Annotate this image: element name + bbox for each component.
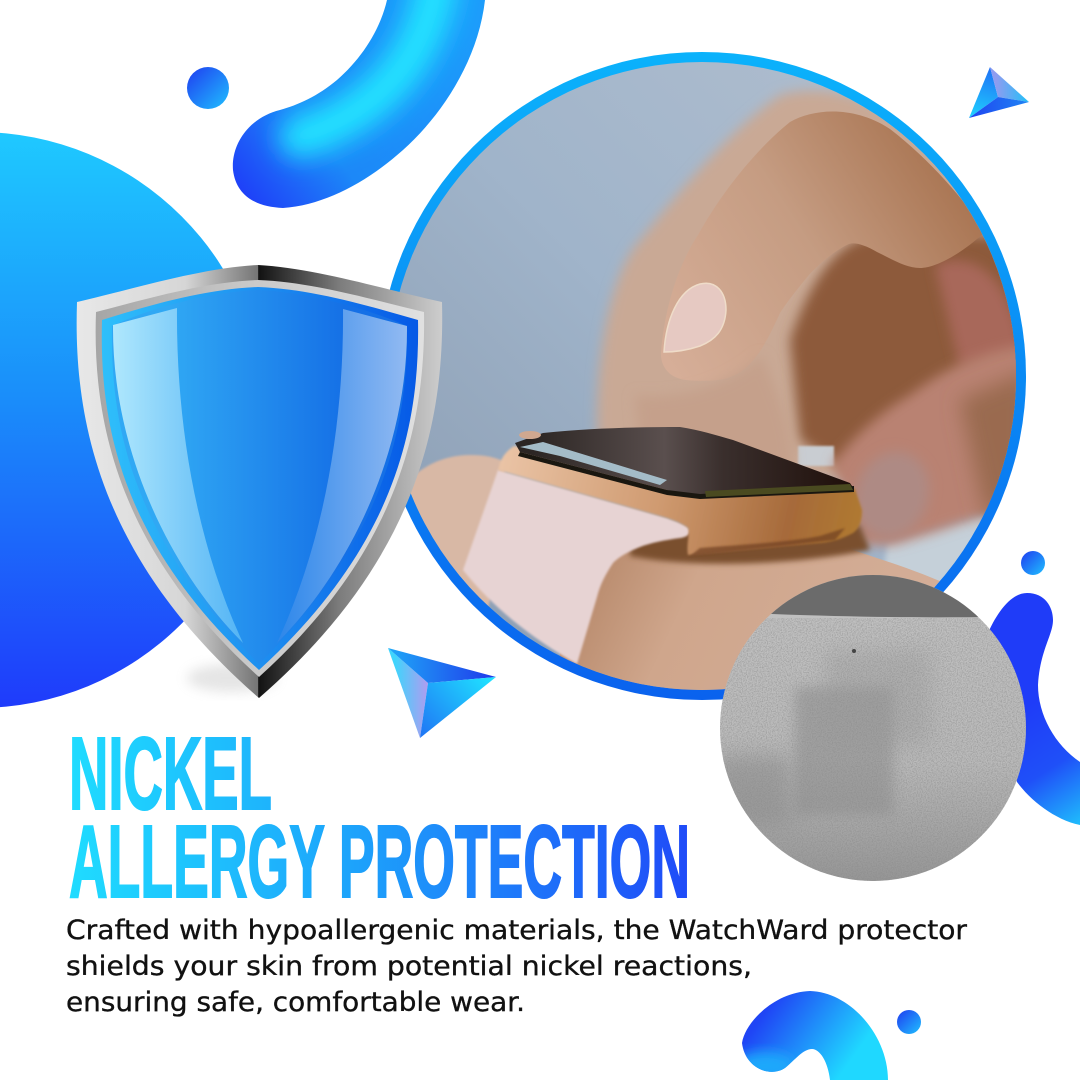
watch band — [463, 470, 690, 664]
body text: shields your skin from potential nickel reactions, — [66, 951, 752, 982]
small dot right — [1021, 551, 1045, 575]
dark top band — [771, 575, 978, 618]
light patch behind finger — [798, 446, 834, 466]
watch case — [498, 446, 862, 555]
photo background — [400, 62, 1016, 690]
forearm — [560, 550, 940, 690]
irritated skin patch — [795, 687, 893, 815]
inner silver ring — [96, 280, 424, 677]
small dot top left — [187, 67, 229, 109]
triangle centre — [388, 648, 496, 738]
small dot bottom — [897, 1010, 921, 1034]
outer silver frame — [77, 265, 442, 698]
blue centre — [112, 290, 407, 664]
lower left shade — [715, 755, 790, 825]
lower blurred finger — [833, 345, 1030, 545]
fingernail — [664, 283, 726, 352]
left wrist skin — [410, 454, 504, 607]
photo circle: finger and smartwatch — [378, 50, 1040, 720]
screen glass reflection — [520, 442, 667, 485]
shield — [77, 265, 442, 698]
index finger — [661, 112, 985, 381]
body text: Crafted with hypoallergenic materials, the WatchWard protector — [66, 915, 968, 946]
blurred rear fingers — [597, 90, 1020, 480]
top wave blob — [225, 0, 490, 212]
left glare — [113, 308, 243, 643]
bottom wave blob — [742, 991, 888, 1080]
watch screen — [515, 427, 854, 497]
title: Nickel Allergy Protection — [69, 716, 690, 919]
blue rim — [102, 287, 418, 670]
right glare — [277, 309, 407, 643]
case lower shade — [690, 528, 845, 556]
big blue circle background — [0, 132, 266, 708]
body text: ensuring safe, comfortable wear. — [66, 987, 525, 1018]
skin texture — [715, 618, 1035, 888]
finger base — [642, 368, 786, 460]
shield shadow — [187, 664, 277, 692]
pink finger upper right — [935, 260, 1025, 368]
body text — [66, 915, 968, 1018]
shadow below watch — [630, 525, 870, 564]
title: Nickel Allergy Protection: NICKEL — [69, 716, 272, 831]
triangle top right — [969, 67, 1029, 118]
grey skin close-up circle — [715, 570, 1035, 890]
screen lower rim — [518, 452, 854, 499]
light corner background — [883, 516, 984, 588]
crown — [519, 431, 541, 439]
dark palm — [790, 235, 1030, 520]
right wave blob — [985, 593, 1080, 825]
